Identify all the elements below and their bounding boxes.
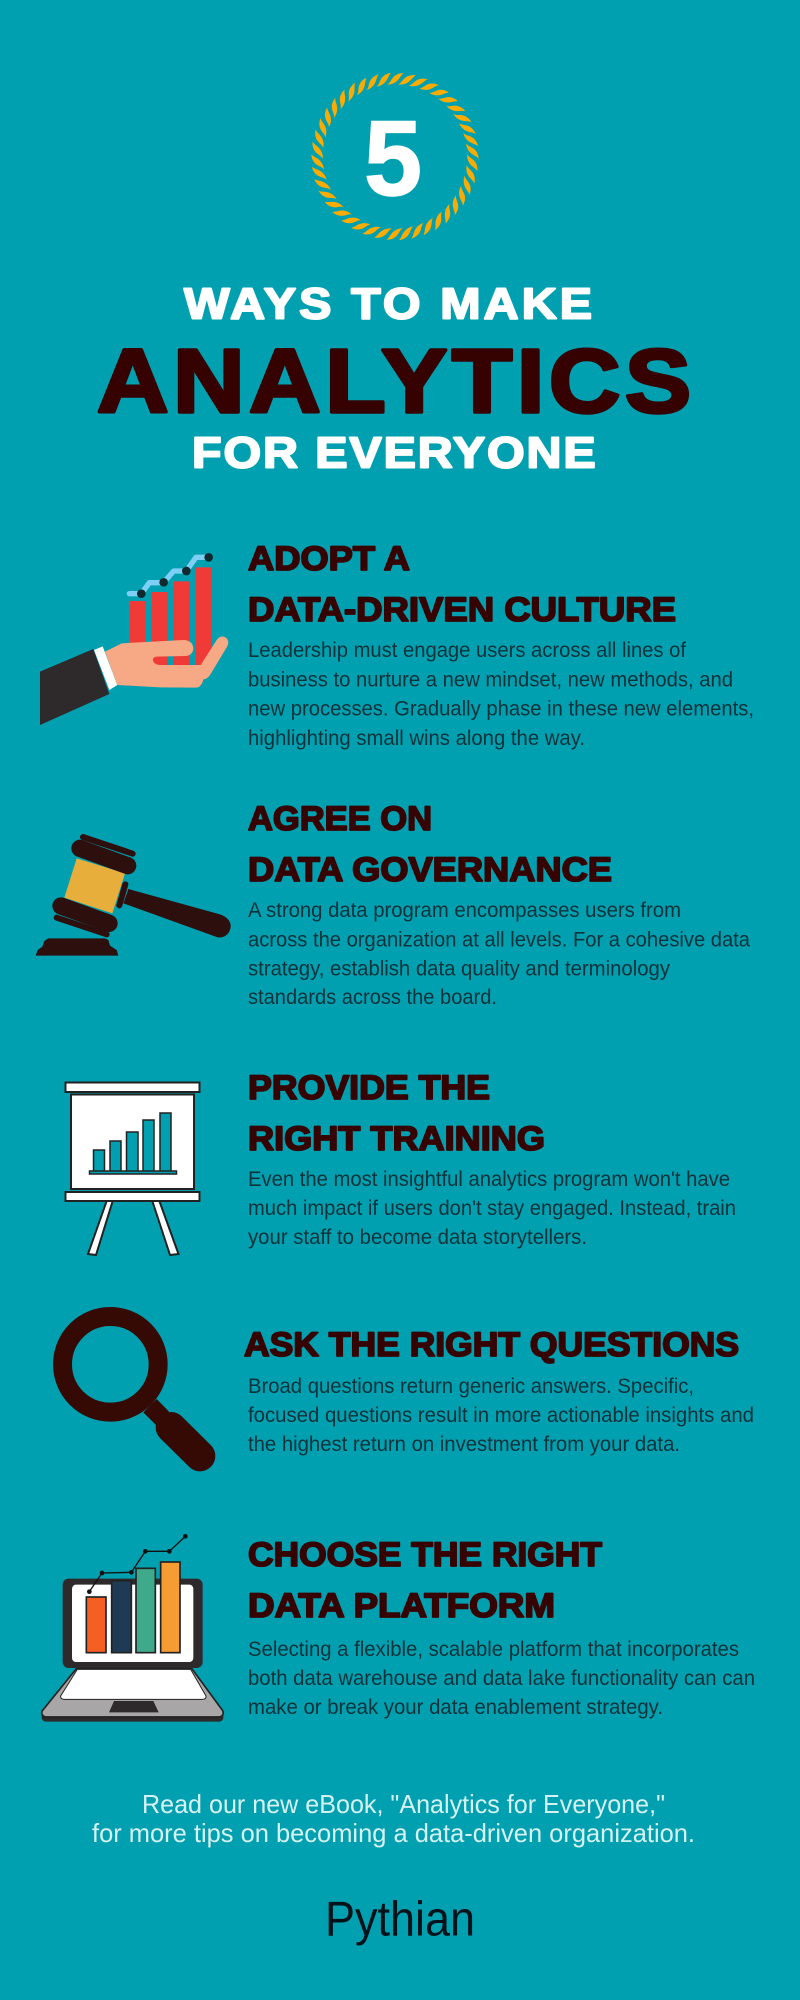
- icon: gavel: [36, 837, 231, 956]
- panel: agree on data governance: [36, 800, 750, 1009]
- body text: Even the most insightful analytics program won't have: [248, 1168, 730, 1191]
- body text: strategy, establish data quality and terminology: [248, 958, 670, 980]
- heading: DATA GOVERNANCE: [248, 851, 612, 889]
- number 5: 5: [364, 98, 422, 218]
- body text: both data warehouse and data lake functionality can can: [248, 1667, 755, 1690]
- logo: Pythian: Pythian: [325, 1892, 475, 1946]
- panel: adopt a data-driven culture: [40, 540, 754, 750]
- heading: AGREE ON: [248, 800, 432, 838]
- body text: Broad questions return generic answers. Specific,: [248, 1375, 694, 1398]
- heading: [248, 1069, 545, 1158]
- body text: Selecting a flexible, scalable platform that incorporates: [248, 1638, 739, 1661]
- body text: [248, 899, 750, 1009]
- heading: PROVIDE THE: [248, 1069, 490, 1107]
- panel: choose the right data platform: [42, 1534, 755, 1722]
- badge: number 5 in rope ring: [311, 73, 479, 240]
- heading: [248, 540, 676, 629]
- body text: make or break your data enablement strategy.: [248, 1696, 663, 1719]
- heading: DATA PLATFORM: [248, 1587, 555, 1625]
- heading: CHOOSE THE RIGHT: [248, 1536, 602, 1574]
- call to action: for more tips on becoming a data-driven organization.: [92, 1818, 695, 1848]
- body text: A strong data program encompasses users from: [248, 899, 681, 922]
- icon: laptop with chart: [42, 1534, 223, 1722]
- body text: [248, 1375, 754, 1456]
- body text: [248, 1168, 736, 1249]
- title line: ways to make: WAYS TO MAKE: [184, 279, 592, 328]
- call to action: [92, 1789, 695, 1848]
- heading: [248, 800, 612, 889]
- title line: for everyone: FOR EVERYONE: [192, 428, 596, 477]
- heading: RIGHT TRAINING: [248, 1120, 545, 1158]
- title: [97, 279, 691, 477]
- body text: business to nurture a new mindset, new methods, and: [248, 668, 733, 692]
- icon: magnifying glass: [62, 1316, 200, 1456]
- body text: highlighting small wins along the way.: [248, 727, 585, 750]
- icon: hand holding bar chart: [40, 553, 228, 725]
- body text: your staff to become data storytellers.: [248, 1226, 587, 1249]
- heading: ADOPT A: [248, 540, 410, 578]
- icon: presentation easel with chart: [66, 1082, 200, 1255]
- body text: the highest return on investment from your data.: [248, 1433, 680, 1456]
- panel: ask the right questions: [62, 1316, 754, 1456]
- body text: [248, 1638, 755, 1719]
- body text: focused questions result in more actionable insights and: [248, 1404, 754, 1427]
- title line: analytics: ANALYTICS: [97, 331, 691, 432]
- icon: rope ring: [311, 73, 479, 240]
- body text: across the organization at all levels. For a cohesive data: [248, 928, 750, 952]
- heading: DATA-DRIVEN CULTURE: [248, 591, 676, 629]
- heading: ASK THE RIGHT QUESTIONS: [244, 1326, 739, 1364]
- panel: provide the right training: [66, 1069, 736, 1255]
- body text: Leadership must engage users across all lines of: [248, 639, 686, 662]
- call to action: Read our new eBook, "Analytics for Everyone,": [142, 1789, 665, 1819]
- body text: much impact if users don't stay engaged. Instead, train: [248, 1197, 736, 1220]
- body text: standards across the board.: [248, 986, 497, 1009]
- body text: new processes. Gradually phase in these new elements,: [248, 698, 754, 720]
- body text: [248, 639, 754, 750]
- heading: [248, 1536, 602, 1625]
